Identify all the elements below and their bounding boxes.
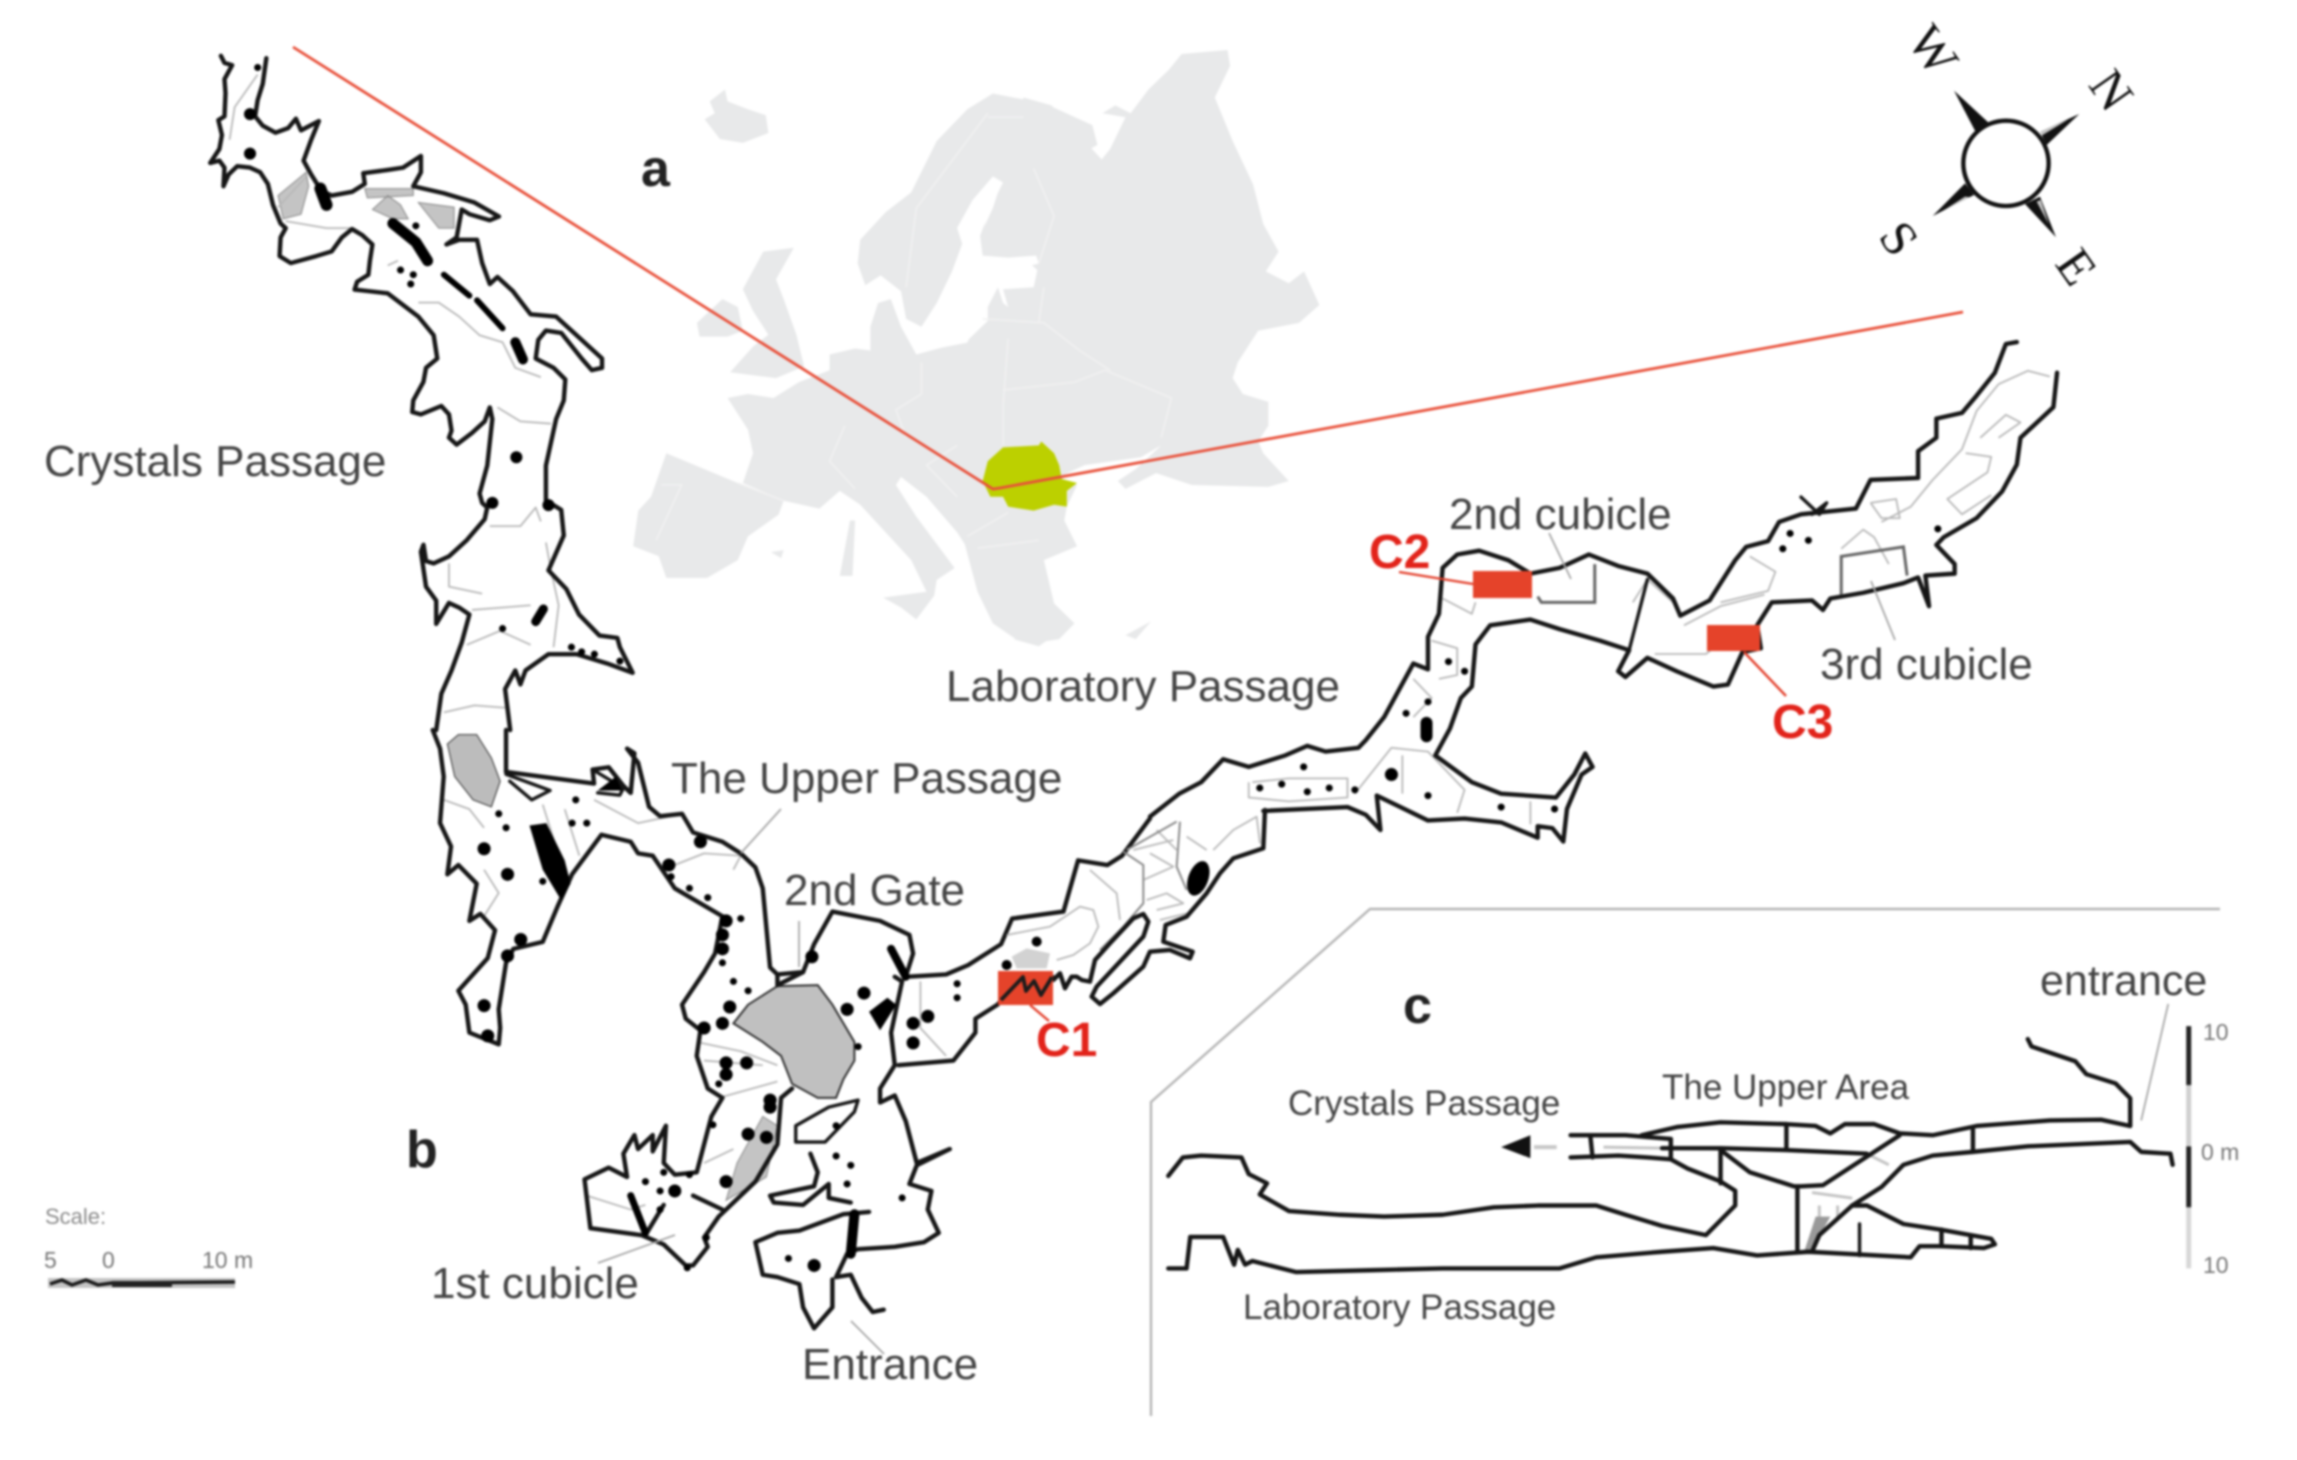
passage outline, west loop	[433, 730, 792, 1265]
gray slope	[726, 1116, 777, 1200]
passage outline, upper passage and east	[506, 730, 1150, 977]
sample site C3 marker	[1707, 625, 1786, 696]
panel b: cave plan, Crystals Passage section	[210, 56, 633, 730]
2nd cubicle outline	[1538, 564, 1595, 602]
label: Laboratory Passage: Laboratory Passage	[946, 662, 1340, 711]
speleothem blob	[1183, 858, 1214, 899]
panel c: longitudinal section	[1151, 909, 2239, 1416]
passage outline, inner walls	[770, 1154, 851, 1205]
scale numbers: 5	[44, 1247, 57, 1273]
scale caption: Scale:	[45, 1204, 106, 1229]
contour lines	[1007, 817, 1260, 960]
panel frame	[1151, 909, 2220, 1416]
label b: b	[406, 1121, 438, 1179]
Finland and north-west Russia	[980, 97, 1110, 271]
Ireland	[697, 299, 743, 337]
Great Britain	[730, 248, 804, 378]
Mediterranean islands	[771, 521, 1151, 646]
speleothem fills	[250, 68, 620, 661]
darker contour lines	[1100, 822, 1187, 950]
plan scale bar	[44, 1204, 253, 1288]
gray floor areas	[278, 172, 454, 228]
inner wall of the branch	[1629, 497, 1827, 650]
country borders	[656, 113, 1171, 548]
floor wall	[1168, 1142, 2173, 1272]
gray patch above C1	[1012, 948, 1050, 968]
scale numbers: 10 m	[202, 1247, 253, 1273]
contour lines	[444, 800, 946, 1210]
label C3: C3	[1772, 696, 1833, 749]
Iceland	[705, 90, 768, 143]
sample site C1 marker	[998, 971, 1053, 1021]
compass ring	[1963, 121, 2049, 206]
passage outline, south-east chamber	[836, 977, 950, 1312]
plan labels	[44, 437, 2033, 1389]
Scandinavia	[858, 93, 1023, 327]
gray pool west	[447, 735, 500, 807]
letter N: N	[2078, 59, 2145, 121]
label C1: C1	[1036, 1014, 1097, 1067]
leader lines for plan labels	[598, 533, 1895, 1354]
scale numbers: 0	[102, 1247, 115, 1273]
spikes	[1933, 91, 2079, 237]
panel b: cave plan, central section	[433, 730, 1150, 1328]
label: The Upper Passage: The Upper Passage	[671, 754, 1062, 803]
label: 1st cubicle: 1st cubicle	[431, 1259, 639, 1308]
dots above C1	[1007, 942, 1037, 965]
passage outline, north wall	[1150, 342, 2017, 817]
scale labels: 0 m	[2201, 1139, 2239, 1165]
passage outline, link to laboratory floor	[645, 972, 1052, 1235]
entrance leader	[2141, 1004, 2168, 1120]
connecting walls	[1571, 1124, 1973, 1252]
label: Entrance: Entrance	[802, 1340, 978, 1389]
arrow toward Crystals Passage	[1501, 1135, 1557, 1158]
contour lines	[230, 74, 559, 712]
upper wall	[1168, 1135, 1735, 1235]
upper area roof	[1642, 1039, 2130, 1135]
scale labels: 10	[2203, 1019, 2229, 1045]
panel labels	[406, 140, 1432, 1179]
letter E: E	[2045, 238, 2108, 295]
panel b: cave plan, laboratory passage	[1150, 342, 2057, 842]
label C2: C2	[1369, 526, 1430, 579]
south wall and capsule gallery	[1053, 810, 1265, 1004]
label a: a	[641, 140, 671, 198]
Romania highlighted	[983, 441, 1077, 511]
scale bar	[48, 1278, 235, 1288]
label: 3rd cubicle: 3rd cubicle	[1820, 640, 2033, 689]
passage outline, south wall	[1263, 373, 2057, 842]
site labels	[1036, 526, 1833, 1067]
red locator lines	[293, 47, 1963, 489]
letter S: S	[1868, 211, 1930, 266]
letter W: W	[1897, 15, 1970, 86]
Iberian peninsula	[633, 453, 784, 578]
contour lines	[1249, 371, 2050, 824]
passage outline, entrance chamber	[755, 1212, 869, 1328]
label: The Upper Area: The Upper Area	[1662, 1068, 1910, 1107]
speleothem fills	[484, 777, 957, 1268]
sample site C2 marker	[1399, 571, 1532, 598]
panel b: passage detail beside the capsule gallery	[1007, 810, 1265, 1004]
label: 2nd Gate: 2nd Gate	[784, 866, 965, 915]
continental Europe	[728, 50, 1319, 643]
gray shaft	[1805, 1217, 1830, 1250]
small chamber outline	[796, 1100, 858, 1142]
Baltic Sea	[906, 177, 1039, 351]
label: Laboratory Passage: Laboratory Passage	[1243, 1288, 1556, 1327]
label c: c	[1403, 977, 1432, 1035]
label: Crystals Passage: Crystals Passage	[44, 437, 386, 486]
scale labels: 10	[2203, 1252, 2229, 1278]
label: 2nd cubicle: 2nd cubicle	[1449, 490, 1672, 539]
scale labels	[2201, 1019, 2239, 1278]
label: Crystals Passage: Crystals Passage	[1288, 1084, 1560, 1123]
3rd cubicle outline	[1841, 547, 1907, 595]
compass rose	[1868, 15, 2145, 295]
scale numbers	[44, 1247, 253, 1273]
gray central lake	[733, 985, 854, 1098]
speleothem fills	[1260, 529, 1938, 809]
section drawing	[1168, 1004, 2189, 1272]
light details	[1604, 1147, 1889, 1235]
panel a: map of Europe	[633, 50, 1319, 646]
label: entrance: entrance	[2040, 957, 2207, 1005]
passage outline, east wall	[255, 58, 633, 730]
passage outline, west wall	[210, 56, 492, 730]
wedge beside the upper passage	[506, 770, 623, 800]
vertical scale bar	[2186, 1026, 2191, 1268]
